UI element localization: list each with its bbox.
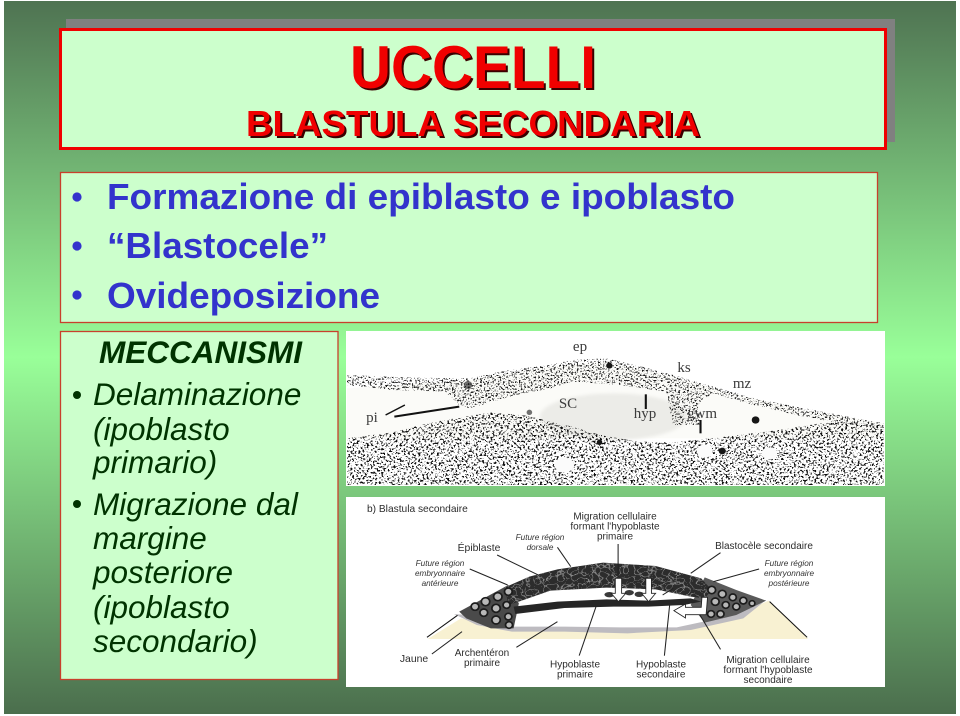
mechanisms list text: (ipoblasto <box>93 411 230 447</box>
diagram labels: Future région <box>416 559 465 568</box>
diagram labels <box>367 504 814 686</box>
key points text: Ovideposizione <box>107 275 380 316</box>
diagram paper <box>346 497 885 687</box>
diagram labels: Hypoblaste <box>550 660 600 670</box>
diagram right margin base <box>691 577 766 623</box>
mechanisms list text: margine <box>93 520 207 556</box>
key points box <box>60 172 878 322</box>
diagram labels: secondaire <box>744 675 793 686</box>
diagram labels: Migration cellulaire <box>726 655 810 666</box>
diagram hypoblast band <box>514 598 701 614</box>
diagram labels: Archentéron <box>455 648 509 659</box>
diagram labels: Future région <box>765 559 814 568</box>
key points text: Formazione di epiblasto e ipoblasto <box>107 176 735 217</box>
micrograph dark spots <box>464 363 759 454</box>
diagram left margin base <box>459 585 519 628</box>
diagram labels: b) Blastula secondaire <box>367 504 468 515</box>
diagram labels: primaire <box>464 658 500 669</box>
title panel shadow <box>66 19 895 142</box>
title panel <box>60 19 895 148</box>
diagram labels: Migration cellulaire <box>573 512 657 522</box>
mechanisms list text: secondario) <box>93 623 258 659</box>
diagram surface lines <box>427 602 807 637</box>
mechanisms list text: primario) <box>92 444 217 480</box>
diagram migrating cells <box>604 590 644 597</box>
micrograph pointer lines <box>386 394 701 433</box>
diagram labels: Blastocèle secondaire <box>715 541 813 552</box>
diagram margin cells <box>471 586 755 628</box>
micrograph labels: gwm <box>687 406 717 422</box>
diagram labels: primaire <box>557 670 593 680</box>
diagram blastocoel and archenteron <box>508 610 719 627</box>
micrograph labels <box>366 339 752 426</box>
micrograph paper <box>346 331 885 486</box>
micrograph cavity shading <box>540 393 687 440</box>
diagram labels: postérieure <box>768 579 810 588</box>
diagram leader lines <box>432 544 759 656</box>
micrograph pale tissue <box>347 362 884 438</box>
key points text <box>107 176 735 316</box>
diagram yolk <box>428 601 808 639</box>
diagram labels: Future région <box>516 533 565 542</box>
diagram arrows <box>611 578 708 618</box>
micrograph labels: ks <box>677 360 691 376</box>
diagram labels: Épiblaste <box>458 541 501 554</box>
diagram labels: embryonnaire <box>764 569 814 578</box>
diagram grey yolk layer <box>454 600 766 633</box>
mechanisms box <box>60 332 338 680</box>
micrograph yolk mass <box>347 412 884 485</box>
micrograph labels: mz <box>733 376 752 392</box>
subtitle: BLASTULA SECONDARIA: BLASTULA SECONDARIA <box>248 105 702 146</box>
diagram labels: primaire <box>597 532 633 542</box>
title: UCCELLI: UCCELLI <box>352 36 598 103</box>
micrograph epiblast layer <box>347 358 884 428</box>
key points text: “Blastocele” <box>107 225 328 266</box>
diagram labels: formant l'hypoblaste <box>723 665 813 676</box>
diagram labels: antérieure <box>422 579 459 588</box>
diagram labels: embryonnaire <box>415 569 465 578</box>
diagram labels: Hypoblaste <box>636 660 686 670</box>
diagram epiblast arch <box>505 563 712 605</box>
mechanisms list text: Delaminazione <box>93 376 301 412</box>
micrograph white vacuoles <box>555 444 777 472</box>
mechanisms bullets <box>73 391 81 508</box>
title: UCCELLI: UCCELLI <box>350 34 596 101</box>
mechanisms list text: Migrazione dal <box>93 486 299 522</box>
micrograph labels: pi <box>366 410 378 426</box>
title panel box <box>60 30 886 148</box>
micrograph labels: ep <box>573 339 587 355</box>
diagram labels: secondaire <box>637 670 686 680</box>
micrograph of secondary blastula <box>346 331 885 486</box>
diagram labels: formant l'hypoblaste <box>570 522 660 532</box>
diagram cell mesh on epiblast <box>505 563 712 605</box>
micrograph labels: SC <box>559 396 577 412</box>
subtitle: BLASTULA SECONDARIA: BLASTULA SECONDARIA <box>246 103 700 144</box>
mechanisms list text <box>92 376 301 659</box>
diagram: secondary blastula <box>346 497 885 687</box>
panel: mechanisms <box>60 332 338 680</box>
diagram labels: Jaune <box>400 654 428 665</box>
mechanisms list text: (ipoblasto <box>93 589 230 625</box>
mechanisms heading: MECCANISMI <box>99 334 303 370</box>
mechanisms list text: posteriore <box>92 554 233 590</box>
diagram labels: dorsale <box>527 543 554 552</box>
micrograph labels: hyp <box>634 406 656 422</box>
panel: key points <box>60 172 878 322</box>
key points bullets <box>72 192 82 300</box>
